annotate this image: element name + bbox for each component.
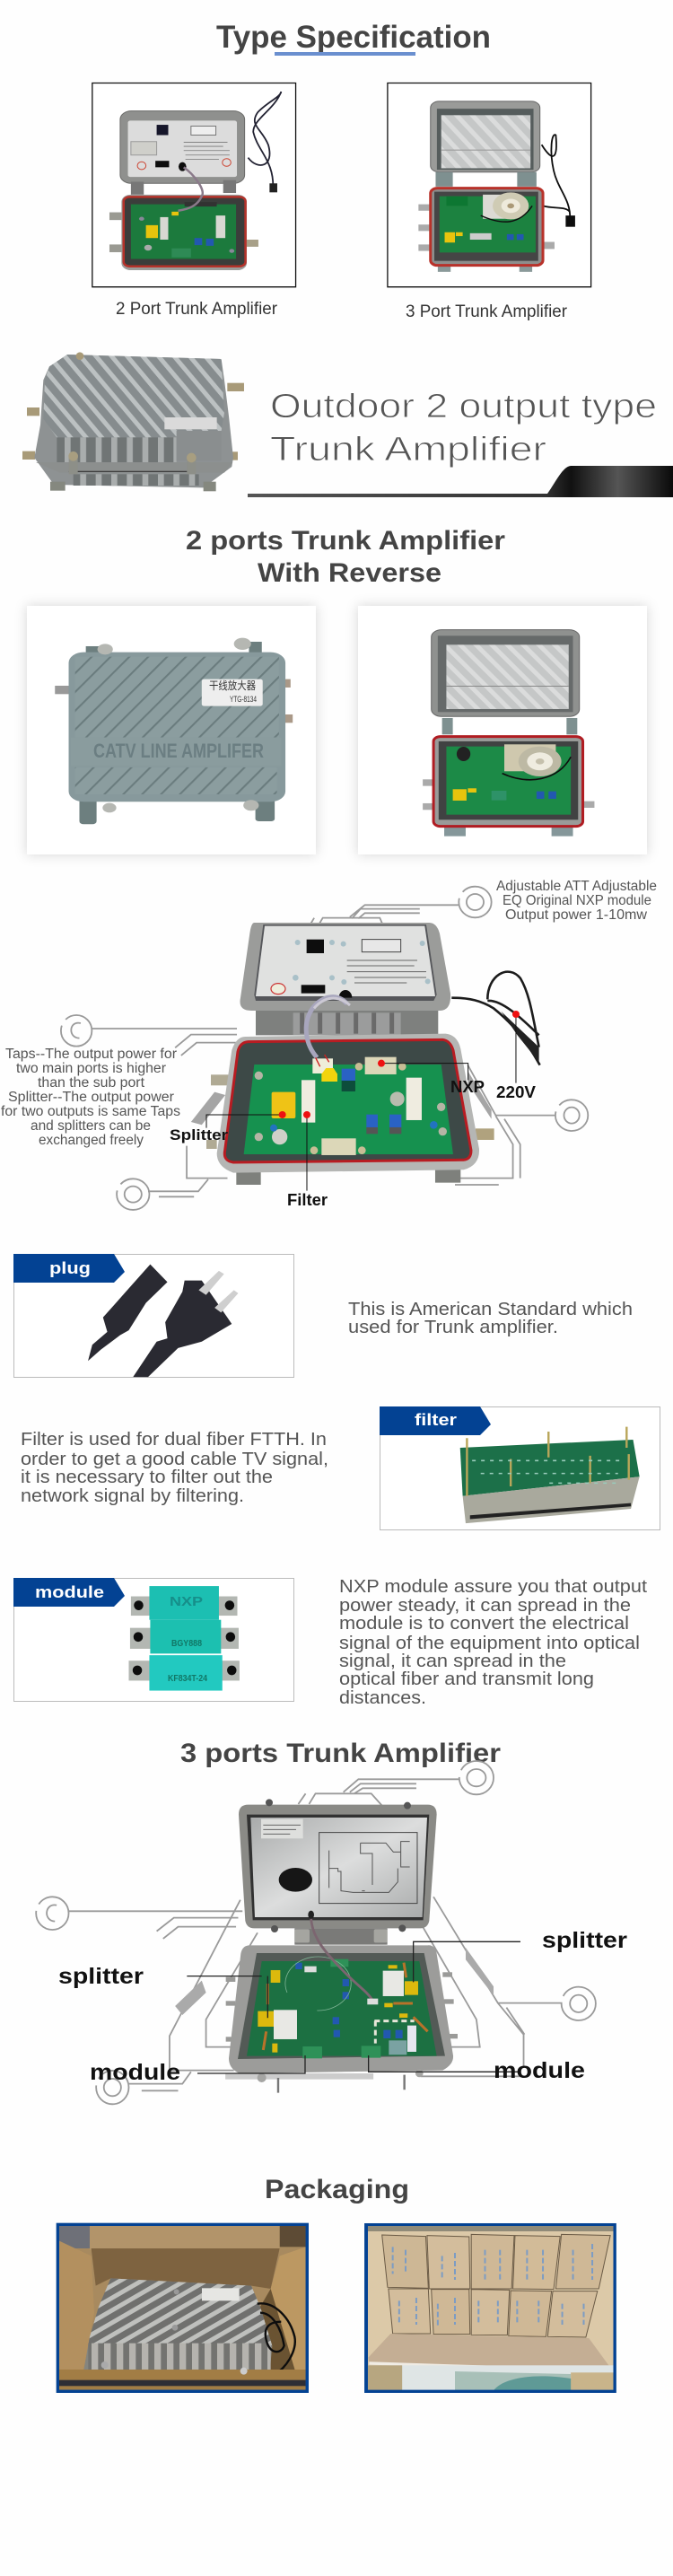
callout: adjustable features: Output power 1-10mw [505,907,648,923]
callout: taps and splitters: than the sub port [38,1075,145,1091]
hinge fins [256,1011,438,1035]
tag: filter [380,1406,491,1435]
photo: module stack [128,1586,240,1691]
text: NXP module description: distances. [339,1688,426,1708]
nameplate text: 干线放大器 [209,679,256,692]
label: module right: module [494,2058,585,2083]
tag text: module: module [35,1583,104,1601]
text: filter description: order to get a good cable TV signal, [21,1450,328,1469]
leader lines [187,1941,520,2073]
panel: filter [380,1406,660,1529]
title: Type Specification: Type Specification [216,20,491,55]
panel: module [13,1578,294,1702]
text: NXP module description: signal of the equipment into optical [339,1634,640,1653]
label: NXP: NXP [450,1078,485,1096]
label: 220V: 220V [496,1083,536,1101]
text: filter description: it is necessary to filter out the [21,1468,273,1487]
text: filter description [21,1430,328,1506]
label: splitter left: splitter [58,1964,144,1989]
hero: outdoor amplifier photo [22,352,244,491]
callout: taps and splitters: Taps--The output power for [5,1047,177,1062]
module text: KF834T-24 [168,1674,207,1684]
leader lines [206,1014,516,1191]
housing text: CATV LINE AMPLIFER: CATV LINE AMPLIFER [93,740,264,762]
ports [211,1074,229,1085]
callout: taps and splitters: for two outputs is same Taps [1,1104,180,1119]
panel: 2 port trunk amplifier photo [92,83,296,287]
photo: filter module [460,1427,640,1523]
text: plug description: used for Trunk amplifier. [348,1318,558,1337]
panel: closed amplifier card [27,606,316,854]
heading: Trunk Amplifier: Trunk Amplifier [270,431,546,469]
callout: taps and splitters [1,1047,180,1148]
photo: open amplifier [423,630,594,837]
circuit lines [36,1761,596,2104]
heading: 2 ports Trunk Amplifier: 2 ports Trunk Amplifier [186,526,505,556]
label: splitter right: splitter [542,1928,627,1953]
text: plug description: This is American Standard which [348,1300,633,1319]
base [217,1034,479,1173]
decorative swoosh [248,466,673,497]
text: NXP module description: optical fiber and transmit long [339,1669,594,1689]
caption: 3 Port Trunk Amplifier: 3 Port Trunk Amplifier [406,302,568,321]
label: Filter: Filter [287,1191,328,1209]
tag text: filter: filter [415,1411,457,1429]
heading: Packaging: Packaging [265,2175,409,2204]
heading: 3 ports Trunk Amplifier: 3 ports Trunk Amplifier [180,1739,501,1768]
label: Splitter: Splitter [170,1126,228,1143]
label: module left: module [90,2060,180,2085]
lid [240,923,450,1011]
text: NXP module description: NXP module assure you that output [339,1577,647,1597]
title underline [275,52,415,56]
photo: stacked cartons [364,2223,616,2393]
text: NXP module description: power steady, it can spread in the [339,1596,631,1616]
tag text: plug: plug [49,1259,91,1277]
module text: NXP [170,1594,203,1609]
panel: plug [13,1254,294,1377]
heading: Outdoor 2 output type: Outdoor 2 output type [270,388,657,425]
heading: With Reverse: With Reverse [258,558,441,588]
callout: adjustable features: EQ Original NXP module [503,893,651,908]
module text: BGY888 [171,1639,202,1649]
text: NXP module description: signal, it can spread in the [339,1652,566,1671]
text: NXP module description: module is to convert the electrical [339,1614,629,1634]
callout: adjustable features [496,879,657,923]
callout: taps and splitters: two main ports is higher [16,1061,166,1076]
icon: power plugs [88,1265,238,1377]
circuit lines [61,887,588,1210]
text: filter description: network signal by filtering. [21,1486,244,1506]
callout: taps and splitters: exchanged freely [39,1133,144,1148]
module text [168,1594,207,1684]
text: plug description [348,1300,633,1337]
caption: 2 Port Trunk Amplifier: 2 Port Trunk Amplifier [116,300,278,319]
diagram: three port amplifier callouts [36,1761,596,2104]
tag: module [13,1578,125,1607]
nameplate model: YTG-8134 [230,695,257,704]
text: NXP module description [339,1577,647,1708]
photo: grey amplifier housing [55,638,293,824]
photo: amplifier open with lid [206,923,540,1185]
panel: 3 port trunk amplifier photo [388,83,591,287]
panel: open amplifier card [358,606,647,854]
tag: plug [13,1254,125,1283]
photo: three port amplifier open [226,1799,458,2093]
red markers [279,1011,520,1118]
callout: taps and splitters: and splitters can be [31,1118,151,1134]
callout: adjustable features: Adjustable ATT Adjustable [496,879,657,894]
callout: taps and splitters: Splitter--The output power [8,1090,174,1105]
photo: amplifier in carton [57,2223,309,2393]
diagram: two port amplifier callouts [61,887,588,1210]
text: filter description: Filter is used for dual fiber FTTH. In [21,1430,327,1450]
